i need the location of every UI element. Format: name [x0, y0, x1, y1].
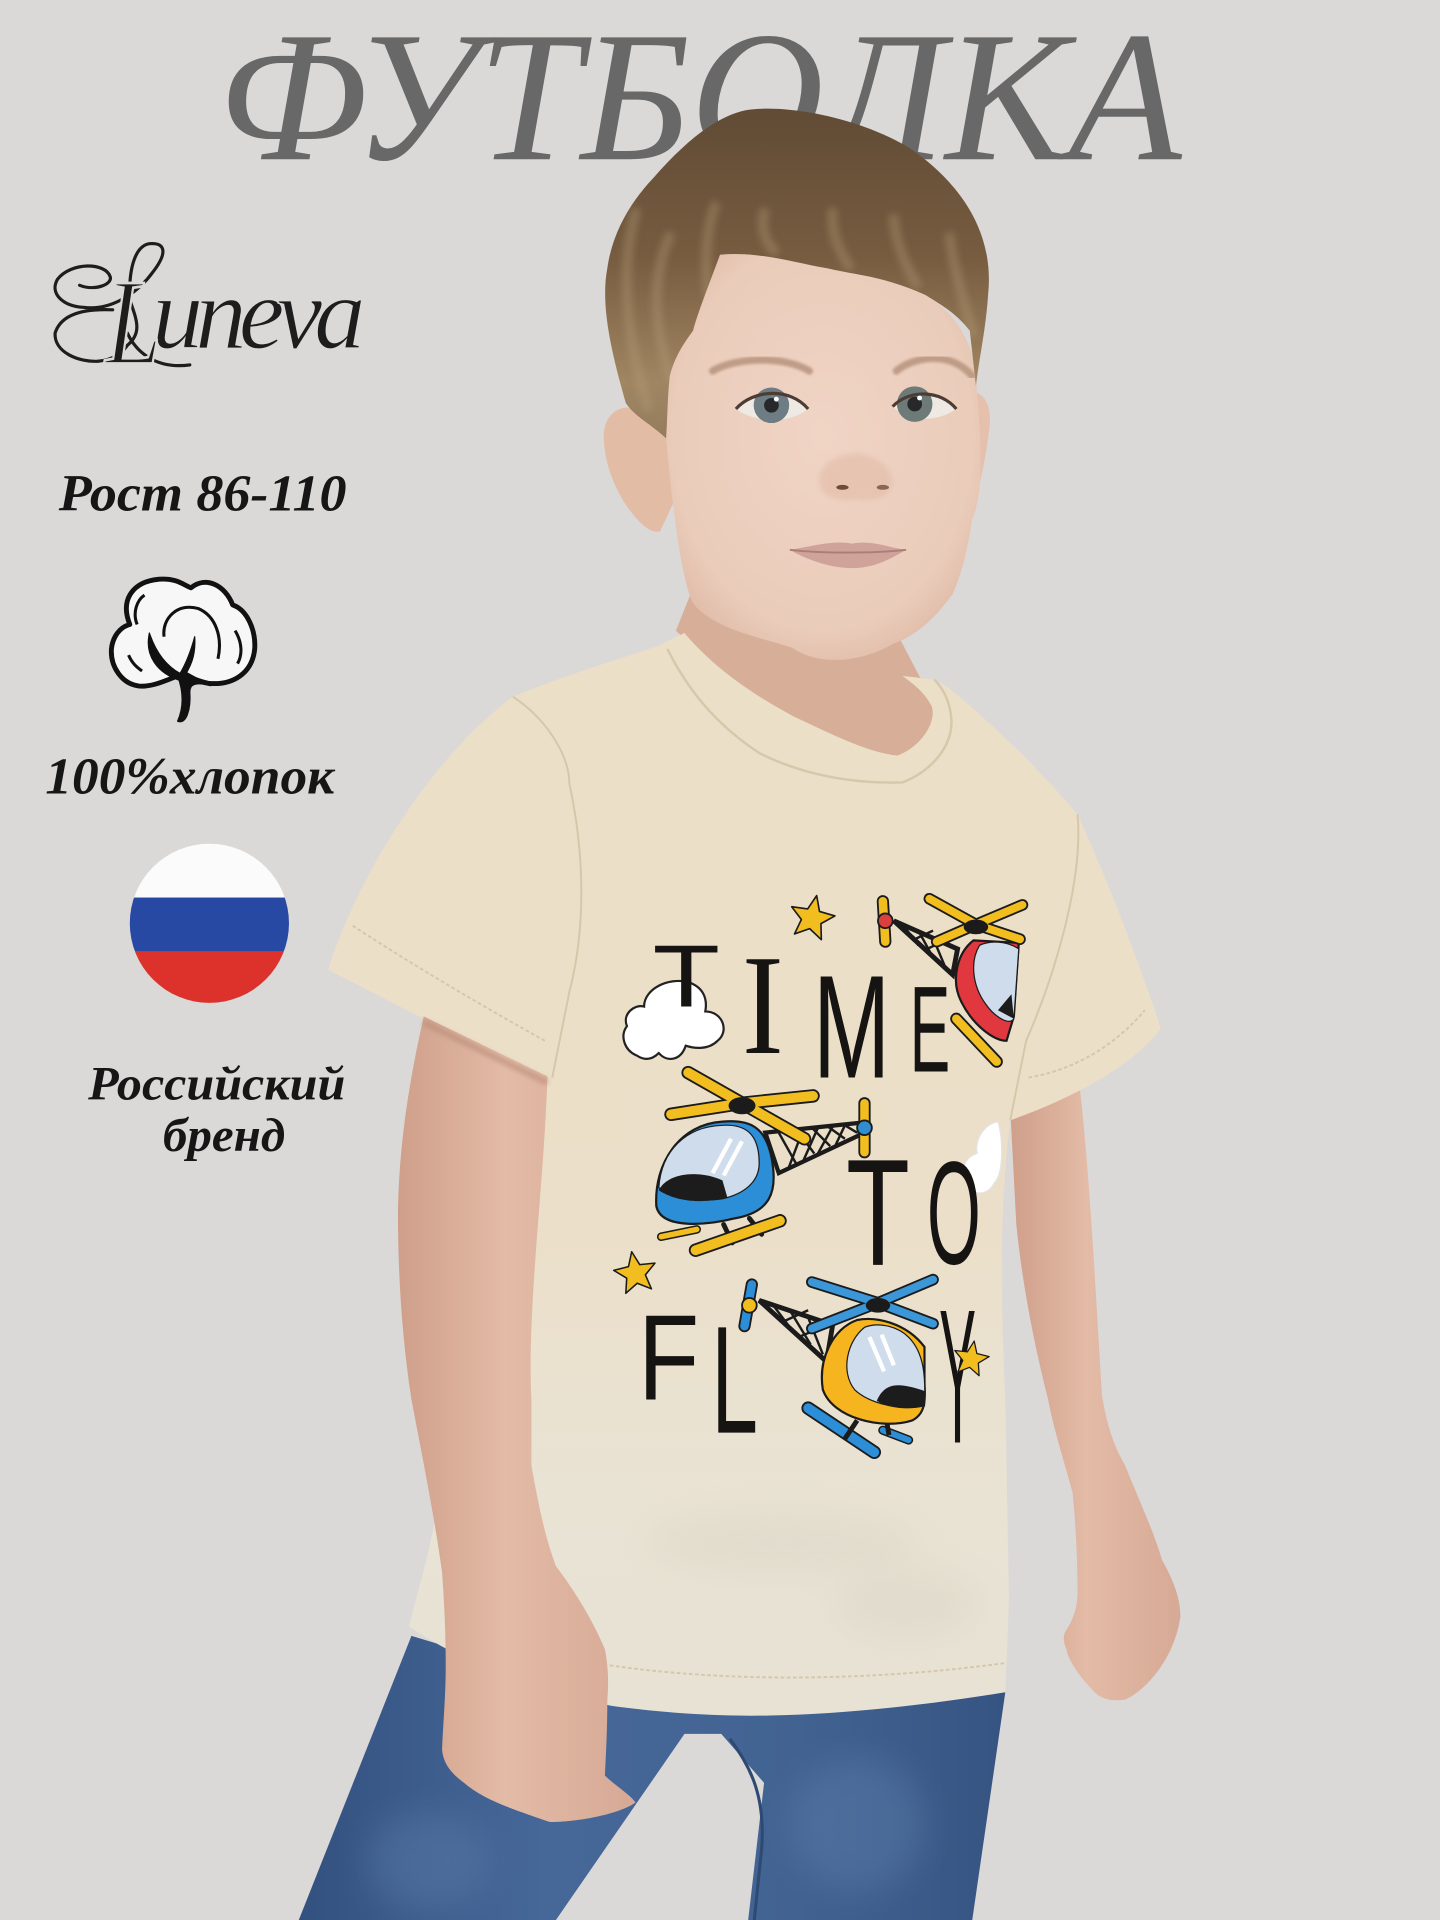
brand origin label	[87, 1058, 345, 1162]
icon: Russian flag	[122, 844, 296, 1004]
brand logo: Luneva: uneva	[152, 257, 362, 371]
shirt print: TIME TO FLY	[611, 891, 1022, 1483]
print: yellow helicopter	[742, 1280, 933, 1452]
sleeve shadow on arm	[424, 1022, 547, 1082]
t-shirt lower folds	[649, 1511, 980, 1641]
brand origin label: бренд	[163, 1109, 285, 1162]
print: word TO: T	[846, 1129, 910, 1298]
ear right	[955, 392, 990, 514]
shirt print: TIME TO FLY: O	[927, 1132, 981, 1296]
jeans	[299, 1636, 1005, 1920]
t-shirt	[328, 633, 1161, 1716]
shirt print: TIME TO FLY: Y	[939, 1270, 976, 1483]
print: word FLY: F	[638, 1290, 699, 1426]
ear left	[604, 407, 680, 532]
icon: cotton boll	[111, 579, 255, 722]
print: blue helicopter	[656, 1073, 872, 1250]
material label: 100%хлопок	[45, 748, 336, 805]
head	[588, 98, 1004, 660]
shirt print: TIME TO FLY: E	[910, 960, 950, 1097]
left arm and hand	[398, 1016, 636, 1822]
title: ФУТБОЛКА	[218, 0, 1183, 200]
right arm	[1010, 1090, 1180, 1700]
nose	[819, 453, 893, 500]
eyebrows	[713, 358, 972, 376]
brand origin label: Российский	[87, 1058, 345, 1111]
t-shirt seams and folds	[353, 697, 1145, 1677]
print: word FLY	[638, 1270, 976, 1483]
mouth	[790, 543, 906, 568]
print: red helicopter	[878, 899, 1022, 1062]
photo: boy in t-shirt	[299, 98, 1180, 1920]
eyes	[736, 386, 956, 423]
print: cloud left	[623, 981, 724, 1059]
hair	[605, 108, 989, 438]
print: word FLY: L	[711, 1295, 758, 1466]
neck	[676, 588, 940, 765]
t-shirt collar	[667, 649, 951, 783]
print: word TIME: T	[653, 927, 720, 1026]
print: word TIME: M	[813, 946, 890, 1110]
print: word TIME: I	[742, 925, 784, 1084]
print: cloud right	[963, 1122, 1002, 1193]
print: stars	[611, 891, 991, 1377]
brand logo: Luneva	[55, 244, 362, 391]
print: word TO	[846, 1129, 981, 1298]
brand logo: Luneva: L	[104, 256, 162, 391]
face	[665, 252, 981, 660]
print: word TIME	[653, 925, 950, 1110]
height label: Рост 86-110	[58, 466, 347, 523]
